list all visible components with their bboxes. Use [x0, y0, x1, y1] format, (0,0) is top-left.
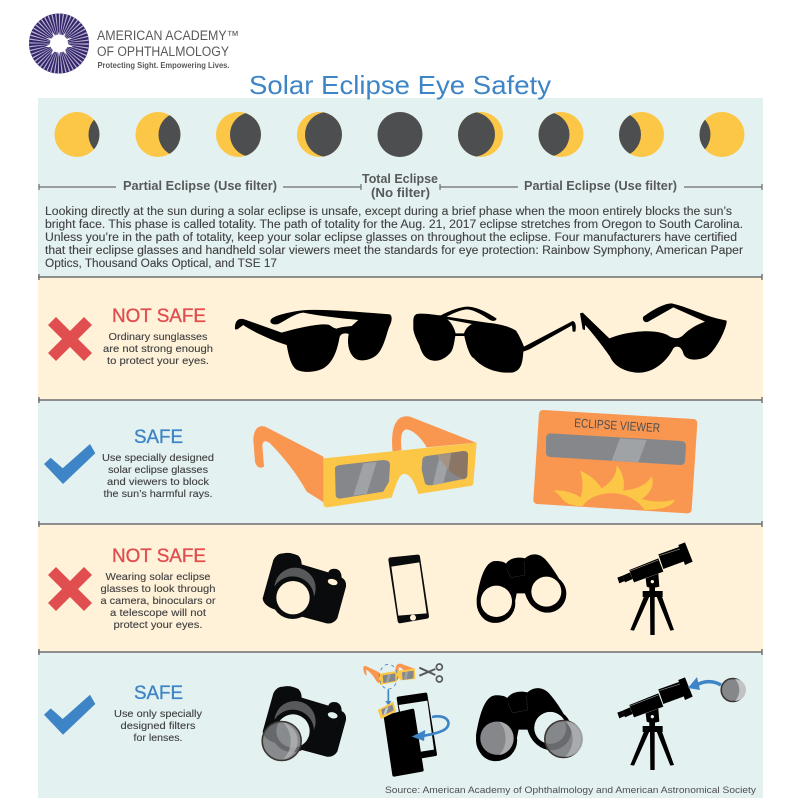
icon: red X, optical devices: [48, 567, 92, 611]
text: safe, eclipse glasses: and viewers to block: [107, 476, 210, 488]
phone back: [385, 710, 422, 775]
sunglasses: aviator: [413, 307, 576, 373]
phase timeline labels: (No filter): [371, 186, 430, 200]
intro paragraph: Looking directly at the sun during a solar eclipse is unsafe, except during a brief phase when the moon entirely blocks the sun’s: [45, 206, 732, 218]
intro paragraph: Unless you’re in the path of totality, keep your solar eclipse glasses on throughout the eclipse. Four manufacturers have certified: [45, 232, 737, 244]
text: safe, eclipse glasses: Use specially designed: [102, 452, 214, 464]
sunglasses: wayfarer: [235, 310, 392, 372]
panel: eclipse phases and intro: [38, 98, 763, 277]
sunglasses: cat eye: [580, 303, 727, 373]
text: safe, lens filters: [114, 683, 203, 744]
text: safe, eclipse glasses: SAFE: [134, 427, 183, 448]
text: safe, lens filters: designed filters: [120, 720, 196, 732]
scissors: [419, 664, 442, 682]
panel: eclipse glasses safe: [38, 400, 763, 524]
panel: optical devices not safe: [38, 524, 763, 652]
small eclipse glasses: [363, 664, 415, 685]
panel: ordinary sunglasses not safe: [38, 277, 763, 400]
logo: American Academy of Ophthalmology: AMERICAN ACADEMY™: [97, 28, 239, 43]
text: not safe, sunglasses: to protect your eyes.: [107, 355, 209, 367]
icon: telescope: [617, 542, 693, 635]
text: eclipse viewer label: ECLIPSE VIEWER: [574, 416, 661, 435]
source note: Source: American Academy of Ophthalmology and American Astronomical Society: [385, 785, 756, 796]
text: not safe, sunglasses: are not strong enough: [103, 343, 213, 355]
filter on phone lens: [378, 702, 396, 719]
text: safe, eclipse glasses: solar eclipse glasses: [108, 464, 208, 476]
arrow to telescope: [688, 677, 721, 690]
intro paragraph: bright face. This phase is called totality. The path of totality for the Aug. 21, 2017 eclipse stretches from Oregon to South Carolina.: [45, 219, 743, 231]
logo: American Academy of Ophthalmology: Protecting Sight. Empowering Lives.: [98, 60, 230, 70]
icon: binoculars: [477, 554, 566, 623]
text: not safe, optical devices: a camera, binoculars or: [100, 595, 216, 607]
text: safe, eclipse glasses: the sun’s harmful rays.: [104, 488, 212, 500]
text: not safe, sunglasses: NOT SAFE: [112, 306, 206, 327]
loose filter: [721, 678, 746, 702]
icon: binoculars with filters: [476, 688, 583, 761]
text: safe, lens filters: Use only specially: [114, 708, 203, 720]
panel: lens filters safe: [38, 652, 763, 798]
phase timeline labels: Partial Eclipse (Use filter): [524, 179, 677, 193]
dashed cut circle: [379, 664, 397, 689]
logo: American Academy of Ophthalmology: OF OPHTHALMOLOGY: [97, 44, 229, 59]
phase timeline labels: [39, 172, 762, 200]
icon: smartphone: [391, 557, 427, 621]
title: Solar Eclipse Eye Safety: [249, 70, 551, 100]
icon: paper eclipse glasses: [253, 416, 477, 507]
arrow down: [385, 689, 391, 706]
phase timeline labels: Total Eclipse: [362, 172, 438, 186]
icon: camera with filter: [262, 686, 346, 760]
intro paragraph: [45, 206, 743, 270]
text: safe, eclipse glasses: [102, 427, 214, 500]
text: not safe, optical devices: glasses to look through: [100, 583, 216, 595]
text: not safe, sunglasses: [103, 306, 213, 367]
icon: blue check, lens filters: [44, 695, 95, 735]
text: not safe, optical devices: protect your eyes.: [114, 619, 202, 631]
text: not safe, optical devices: [100, 546, 216, 631]
curved arrow: [412, 716, 448, 741]
phone front: [398, 694, 435, 759]
logo: American Academy of Ophthalmology: [29, 14, 239, 74]
icon: red X, sunglasses: [48, 317, 92, 361]
phase timeline labels: Partial Eclipse (Use filter): [123, 179, 277, 193]
intro paragraph: that their eclipse glasses and handheld solar viewers meet the standards for eye protection: Rainbow Symphony, American Paper: [45, 245, 743, 257]
icon: handheld eclipse viewer: [537, 414, 693, 511]
text: safe, lens filters: for lenses.: [134, 732, 182, 744]
text: not safe, optical devices: NOT SAFE: [112, 546, 206, 567]
text: safe, lens filters: SAFE: [134, 683, 183, 704]
text: not safe, optical devices: a telescope will not: [110, 607, 206, 619]
intro paragraph: Optics, Thousand Oaks Optical, and TSE 17: [45, 258, 277, 270]
eclipse phase sequence: [54, 112, 744, 157]
icon: three pairs of sunglasses: [235, 303, 727, 373]
icon: telescope with filter: [617, 677, 746, 770]
text: not safe, sunglasses: Ordinary sunglasses: [108, 331, 208, 343]
icon: camera: [263, 553, 346, 623]
icon: glasses filter taped to smartphone: [363, 664, 448, 775]
icon: blue check, glasses: [44, 444, 95, 484]
text: not safe, optical devices: Wearing solar eclipse: [106, 571, 211, 583]
